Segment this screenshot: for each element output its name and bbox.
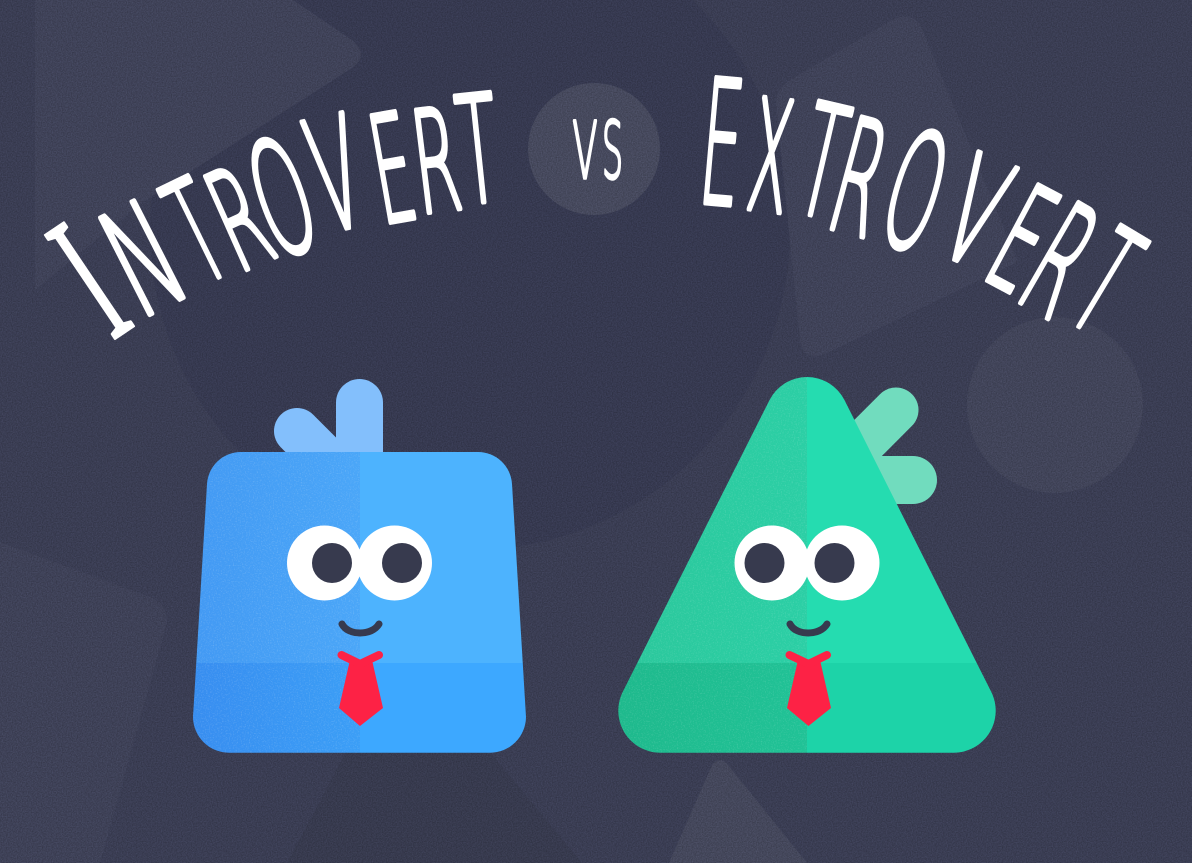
vs badge circle [528,83,660,215]
title: Introvert: R [186,136,294,303]
character: green extrovert [610,370,1004,755]
title: Introvert: I [18,185,160,375]
blue smile [342,624,379,633]
title: Extrovert [693,43,1166,366]
blue hair [297,402,360,480]
title: Extrovert: V [920,124,1032,301]
title: Extrovert: O [862,96,967,291]
title: Introvert: E [358,82,427,258]
decorative circle right [967,317,1143,493]
title: Introvert: V [292,82,379,269]
green smile [790,624,827,633]
title: Extrovert: T [783,72,861,255]
title: Introvert [18,63,507,375]
title: Introvert: R [404,79,469,247]
blue tie [339,655,383,726]
green hair [840,410,913,480]
title: Extrovert: E [693,43,750,246]
label: vs: V [572,107,598,197]
green body [610,370,1004,755]
title: Introvert: T [449,63,507,239]
blue eyes [287,526,432,600]
blue body [190,450,530,755]
title: Introvert: T [143,149,251,316]
green tie [787,655,831,726]
title: Extrovert: X [740,67,801,250]
title: Extrovert: R [813,85,905,275]
character: blue introvert [190,402,530,755]
title: Extrovert: R [994,171,1125,354]
text: S [602,107,623,197]
title: Introvert: O [227,104,338,296]
title: Extrovert: E [963,155,1080,326]
green eyes [734,526,880,600]
title: Introvert: N [78,169,211,350]
